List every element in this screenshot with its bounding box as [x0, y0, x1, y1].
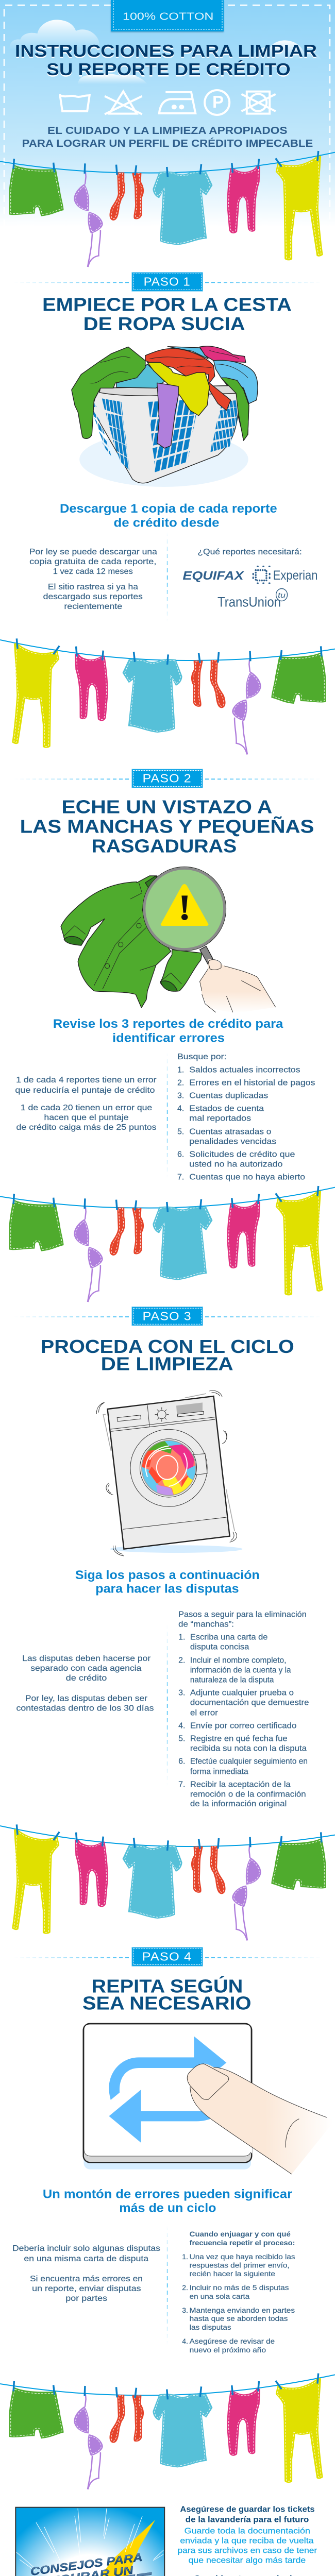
logo: Equifax: EQUIFAX — [182, 569, 245, 582]
step 4 heading — [82, 1975, 252, 2013]
step 4 left text: un reporte, enviar disputas — [32, 2284, 141, 2293]
step 1 heading: EMPIECE POR LA CESTA — [42, 294, 292, 315]
step 3 dispute steps: naturaleza de la disputa — [190, 1675, 274, 1684]
step 1 left text: 1 vez cada 12 meses — [53, 567, 133, 576]
tips column: enviada y la que reciba de vuelta — [180, 2537, 314, 2546]
step 2 checklist: 6. — [177, 1150, 184, 1159]
title: SU REPORTE DE CRÉDITO — [46, 60, 291, 79]
step 1 right text: bureaus: ¿Qué reportes necesitará: — [197, 548, 302, 556]
step 2 checklist: 3. — [177, 1092, 184, 1100]
step 4 repeat steps: Cuando enjuagar y con qué — [190, 2230, 291, 2238]
step 2 checklist — [177, 1053, 315, 1182]
step 3 dispute steps: Pasos a seguir para la eliminación — [178, 1610, 307, 1619]
step 4 repeat steps: Mantenga enviando en partes — [190, 2306, 295, 2314]
logo: TransUnion: TransUnion — [217, 595, 281, 610]
step 2 checklist: 7. — [177, 1173, 184, 1182]
step 4 subheading: Un montón de errores pueden significar — [43, 2188, 292, 2201]
dashed stitched border: top — [4, 5, 330, 227]
step 2 left text: hacen que el puntaje — [44, 1113, 129, 1122]
step 2 checklist: 1. — [177, 1066, 184, 1075]
step 3 left text — [16, 1654, 154, 1713]
step 3 dispute steps: disputa concisa — [190, 1642, 249, 1651]
step 3 dispute steps: Envíe por correo certificado — [190, 1721, 296, 1730]
clothesline 3 — [0, 1186, 335, 1302]
step 4 repeat steps: hasta que se aborden todas — [190, 2314, 288, 2323]
step 1 heading — [42, 294, 292, 334]
step 3 badge: PASO 3 — [142, 1309, 192, 1323]
step 3 left text: Las disputas deben hacerse por — [22, 1654, 151, 1663]
step 3 dispute steps: 2. — [178, 1656, 185, 1665]
step 2 left text: de crédito caiga más de 25 puntos — [16, 1123, 157, 1132]
step 2 subheading: identificar errores — [112, 1031, 225, 1045]
step 4 badge: PASO 4 — [142, 1950, 192, 1963]
step 4 repeat steps: nuevo el próximo año — [190, 2346, 266, 2354]
step 2 checklist: Saldos actuales incorrectos — [189, 1066, 300, 1075]
step 3 dispute steps: 1. — [178, 1633, 185, 1641]
step 4 repeat steps: Incluir no más de 5 disputas — [190, 2283, 289, 2292]
tips column: para sus archivos en caso de tener — [177, 2547, 317, 2555]
step 3 left text: de crédito — [66, 1674, 107, 1683]
step 1 badge — [14, 273, 322, 291]
step 4 repeat steps: en una sola carta — [190, 2292, 249, 2300]
header sky background — [0, 0, 335, 227]
step 3 left text: Por ley, las disputas deben ser — [25, 1694, 148, 1703]
illustration: repeat button with finger — [83, 2024, 335, 2174]
step 3 heading: PROCEDA CON EL CICLO — [41, 1336, 294, 1357]
step 2 checklist: usted no ha autorizado — [189, 1160, 283, 1169]
step 4 repeat steps: 2. — [182, 2283, 188, 2292]
step 2 checklist: Cuentas que no haya abierto — [189, 1173, 305, 1182]
logo: TransUnion: tu — [278, 591, 286, 599]
step 3 dispute steps: información de la cuenta y la — [190, 1666, 291, 1674]
step 2 checklist: penalidades vencidas — [189, 1138, 276, 1146]
step 2 badge: PASO 2 — [142, 771, 192, 785]
step 3 heading — [41, 1336, 294, 1374]
clothesline 5 — [0, 2374, 335, 2489]
step 2 checklist: Busque por: — [177, 1053, 226, 1061]
step 2 left text — [15, 1076, 157, 1132]
step 2 checklist: Cuentas duplicadas — [189, 1092, 268, 1100]
step 4 subheading — [43, 2188, 292, 2215]
step 1 subheading — [60, 502, 277, 530]
step 3 dispute steps: el error — [190, 1708, 219, 1717]
step 4 left text: por partes — [65, 2294, 107, 2303]
step 1 left text: descargado sus reportes — [43, 592, 143, 601]
icon letter P: P — [212, 92, 224, 111]
step 2 heading: LAS MANCHAS Y PEQUEÑAS — [20, 816, 314, 837]
step 3 dispute steps: 3. — [178, 1689, 185, 1698]
illustration: washing machine — [96, 1391, 243, 1556]
step 3 dispute steps: recibida su nota con la disputa — [190, 1744, 307, 1753]
step 1 left text: copia gratuita de cada reporte, — [29, 557, 156, 566]
step 4 left text — [12, 2244, 160, 2303]
logo: Experian: Experian — [273, 568, 317, 583]
step 2 checklist: 5. — [177, 1128, 184, 1137]
step 2 heading — [20, 796, 314, 856]
subtitle — [22, 125, 313, 149]
step 4 repeat steps: las disputas — [190, 2323, 231, 2331]
step 3 dispute steps: Efectúe cualquier seguimiento en — [190, 1757, 308, 1766]
subtitle: PARA LOGRAR UN PERFIL DE CRÉDITO IMPECABLE — [22, 138, 313, 149]
step 2 heading: ECHE UN VISTAZO A — [61, 796, 272, 817]
step 2 checklist: 4. — [177, 1105, 184, 1113]
tips column: que necesitar algo más tarde — [189, 2556, 306, 2565]
step 4 left text: en una misma carta de disputa — [24, 2255, 148, 2263]
step 4 badge — [14, 1947, 322, 1966]
step 2 subheading — [53, 1017, 283, 1045]
step 1 subheading: Descargue 1 copia de cada reporte — [60, 502, 277, 516]
step 3 dispute steps: de la información original — [190, 1800, 287, 1808]
step 3 subheading: Siga los pasos a continuación — [75, 1568, 260, 1582]
step 3 dispute steps: 5. — [178, 1734, 185, 1743]
tips column: de la lavandería para el futuro — [186, 2516, 309, 2524]
step 2 checklist: Cuentas atrasadas o — [189, 1128, 272, 1137]
step 3 subheading — [75, 1568, 260, 1596]
step 3 dispute steps: 7. — [178, 1780, 185, 1789]
step 3 dispute steps: documentación que demuestre — [190, 1699, 309, 1707]
step 1 heading: DE ROPA SUCIA — [83, 313, 245, 334]
step 4 repeat steps: 3. — [182, 2306, 188, 2314]
step 4 heading: SEA NECESARIO — [82, 1992, 252, 2013]
step 1 left text — [29, 548, 157, 611]
step 4 repeat steps: 4. — [182, 2337, 188, 2345]
step 4 repeat steps: Asegúrese de revisar de — [190, 2337, 275, 2345]
step 1 left text: Por ley se puede descargar una — [29, 548, 157, 556]
step 2 checklist: mal reportados — [189, 1114, 251, 1123]
clothesline 4 — [0, 1824, 335, 1940]
step 3 left text: contestadas dentro de los 30 días — [16, 1704, 154, 1713]
step 4 repeat steps: Una vez que haya recibido las — [190, 2252, 295, 2261]
step 4 left text: Si encuentra más errores en — [30, 2275, 143, 2283]
title — [15, 41, 317, 79]
label tab: 100% cotton — [111, 0, 224, 31]
step 3 dispute steps: Registre en qué fecha fue — [190, 1734, 288, 1743]
step 3 dispute steps: forma inmediata — [190, 1767, 248, 1776]
step 2 badge — [14, 769, 322, 788]
clothesline 2 — [0, 638, 335, 754]
step 3 dispute steps: Recibir la aceptación de la — [190, 1780, 291, 1789]
step 3 dispute steps: Incluir el nombre completo, — [190, 1656, 287, 1665]
title: INSTRUCCIONES PARA LIMPIAR — [15, 41, 317, 60]
subtitle: EL CUIDADO Y LA LIMPIEZA APROPIADOS — [47, 125, 288, 137]
step 3 dispute steps — [178, 1610, 309, 1808]
step 1 subheading: de crédito desde — [113, 516, 220, 530]
step 4 left text: Debería incluir solo algunas disputas — [12, 2244, 160, 2253]
step 4 heading: REPITA SEGÚN — [91, 1975, 243, 1997]
step 3 dispute steps: Escriba una carta de — [190, 1633, 268, 1641]
step 1 badge: PASO 1 — [144, 275, 191, 288]
illustration: laundry basket — [72, 346, 258, 487]
step 3 dispute steps: de “manchas”: — [178, 1620, 234, 1629]
step 3 subheading: para hacer las disputas — [95, 1582, 239, 1596]
logo: Experian — [253, 566, 317, 583]
step 2 heading: RASGADURAS — [91, 835, 237, 856]
step 3 heading: DE LIMPIEZA — [101, 1353, 233, 1374]
step 4 repeat steps: recién hacer la siguiente — [190, 2269, 275, 2278]
label tab: 100% cotton: 100% COTTON — [123, 11, 213, 23]
tips column: Guarde toda la documentación — [185, 2527, 310, 2536]
icons: laundry care symbols — [60, 90, 276, 115]
step 4 repeat steps — [182, 2230, 295, 2354]
step 3 dispute steps: 4. — [178, 1721, 185, 1730]
step 2 left text: 1 de cada 4 reportes tiene un error — [16, 1076, 157, 1084]
clouds in header — [10, 20, 322, 84]
step 3 dispute steps: remoción o de la confirmación — [190, 1790, 306, 1799]
step 2 left text: 1 de cada 20 tienen un error que — [21, 1104, 152, 1112]
step 3 left text: separado con cada agencia — [30, 1664, 142, 1673]
step 2 checklist: Solicitudes de crédito que — [189, 1150, 295, 1159]
step 2 subheading: Revise los 3 reportes de crédito para — [53, 1017, 283, 1031]
step 4 subheading: más de un ciclo — [119, 2201, 216, 2215]
step 3 dispute steps: 6. — [178, 1757, 185, 1766]
step 4 repeat steps: 1. — [182, 2252, 188, 2261]
step 3 dispute steps: Adjunte cualquier prueba o — [190, 1689, 294, 1698]
illustration: green shirt under magnifying glass — [61, 867, 276, 1013]
step 3 badge — [14, 1307, 322, 1326]
poster: consejos para un reporte libre de manchas — [15, 2507, 165, 2576]
step 4 repeat steps: respuestas del primer envío, — [190, 2261, 290, 2269]
step 4 repeat steps: frecuencia repetir el proceso: — [190, 2239, 295, 2247]
step 2 checklist: 2. — [177, 1079, 184, 1088]
step 1 left text: recientemente — [64, 602, 122, 611]
tips column — [175, 2505, 320, 2576]
step 2 checklist: Errores en el historial de pagos — [189, 1079, 315, 1088]
step 2 checklist: Estados de cuenta — [189, 1105, 264, 1113]
tips column: Asegúrese de guardar los tickets — [180, 2505, 315, 2514]
step 2 left text: que reduciría el puntaje de crédito — [15, 1086, 155, 1095]
clothesline 1 — [0, 151, 335, 267]
step 1 left text: El sitio rastrea si ya ha — [48, 583, 138, 591]
